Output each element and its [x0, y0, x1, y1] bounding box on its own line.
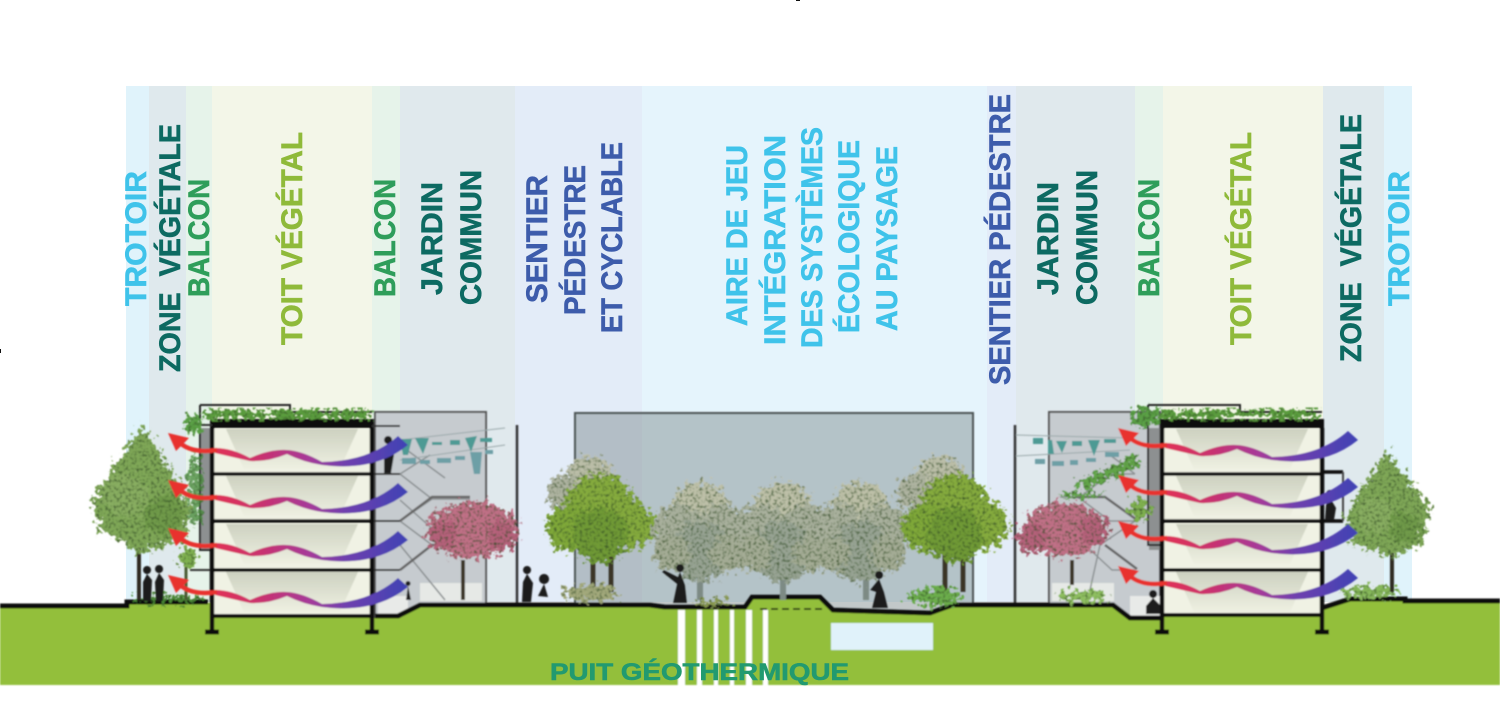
dashed water level	[760, 608, 826, 610]
climbing vines left	[179, 415, 203, 568]
courtyard posts	[517, 425, 1015, 606]
ground surface line	[0, 597, 1500, 618]
label: balcon right: BALCON	[1133, 179, 1166, 297]
label: trotoir right: TROTOIR	[1383, 171, 1416, 306]
bunting right	[1016, 435, 1130, 466]
right plaza tree	[897, 456, 1009, 595]
label: balcon inner left: BALCON	[369, 179, 402, 297]
right ventilation ribbons	[1118, 428, 1358, 599]
right building floors	[1164, 429, 1320, 473]
pink tree right	[1017, 503, 1110, 585]
right street tree	[1346, 450, 1432, 592]
label: jardin commun left	[416, 170, 488, 305]
label: sentier pédestre et cyclable	[521, 142, 629, 333]
stray edge marks	[0, 0, 800, 353]
geothermal well stripes	[678, 610, 768, 685]
bunting left	[400, 428, 505, 474]
label: aire de jeu	[721, 127, 904, 348]
label: sentier pédestre et cyclable: ET CYCLABLE	[596, 142, 629, 333]
label: trotoir left: TROTOIR	[120, 171, 153, 306]
shrubs	[134, 585, 1400, 606]
central pale trees	[652, 482, 908, 600]
left street tree	[92, 425, 190, 600]
left ventilation ribbons	[168, 433, 408, 608]
label: jardin commun right: JARDIN	[1032, 182, 1065, 295]
label: balcon left: BALCON	[183, 179, 216, 297]
label: jardin commun left: JARDIN	[416, 182, 449, 295]
underground water tank	[831, 623, 933, 650]
label: jardin commun right: COMMUN	[1071, 170, 1104, 305]
label: aire de jeu: AIRE DE JEU	[721, 145, 754, 326]
left courtyard grey volume	[375, 412, 486, 618]
people silhouettes	[143, 436, 1336, 614]
climbing vines right	[1058, 408, 1159, 522]
label: toit végétal left: TOIT VÉGÉTAL	[275, 132, 309, 345]
label: aire de jeu: ÉCOLOGIQUE	[832, 140, 866, 333]
panel: section drawing	[0, 405, 1500, 685]
panel: coloured zone bands	[126, 86, 1412, 602]
label: sentier pédestre right: SENTIER PÉDESTRE	[983, 94, 1017, 385]
label: zone végétale right: ZONE VÉGÉTALE	[1334, 114, 1368, 362]
right building	[1148, 405, 1343, 632]
label: zone végétale left: ZONE VÉGÉTALE	[153, 124, 187, 372]
label: aire de jeu: AU PAYSAGE	[871, 146, 904, 331]
left plaza tree	[546, 456, 654, 592]
ground	[0, 598, 1500, 685]
label: aire de jeu: INTÉGRATION	[758, 135, 792, 345]
label: jardin commun right	[1032, 170, 1104, 305]
right courtyard grey volume	[1049, 412, 1160, 618]
label: aire de jeu: DES SYSTÈMES	[795, 127, 829, 348]
left building	[190, 405, 400, 632]
label: puit géothermique: PUIT GÉOTHERMIQUE	[550, 658, 849, 686]
central grey backdrop volume	[575, 413, 973, 616]
label: toit végétal right: TOIT VÉGÉTAL	[1224, 132, 1258, 345]
label: sentier pédestre et cyclable: PÉDESTRE	[558, 165, 592, 315]
left building floors	[214, 429, 370, 473]
label: sentier pédestre et cyclable: SENTIER	[521, 175, 554, 303]
pink tree left	[426, 502, 518, 600]
label: jardin commun left: COMMUN	[455, 170, 488, 305]
